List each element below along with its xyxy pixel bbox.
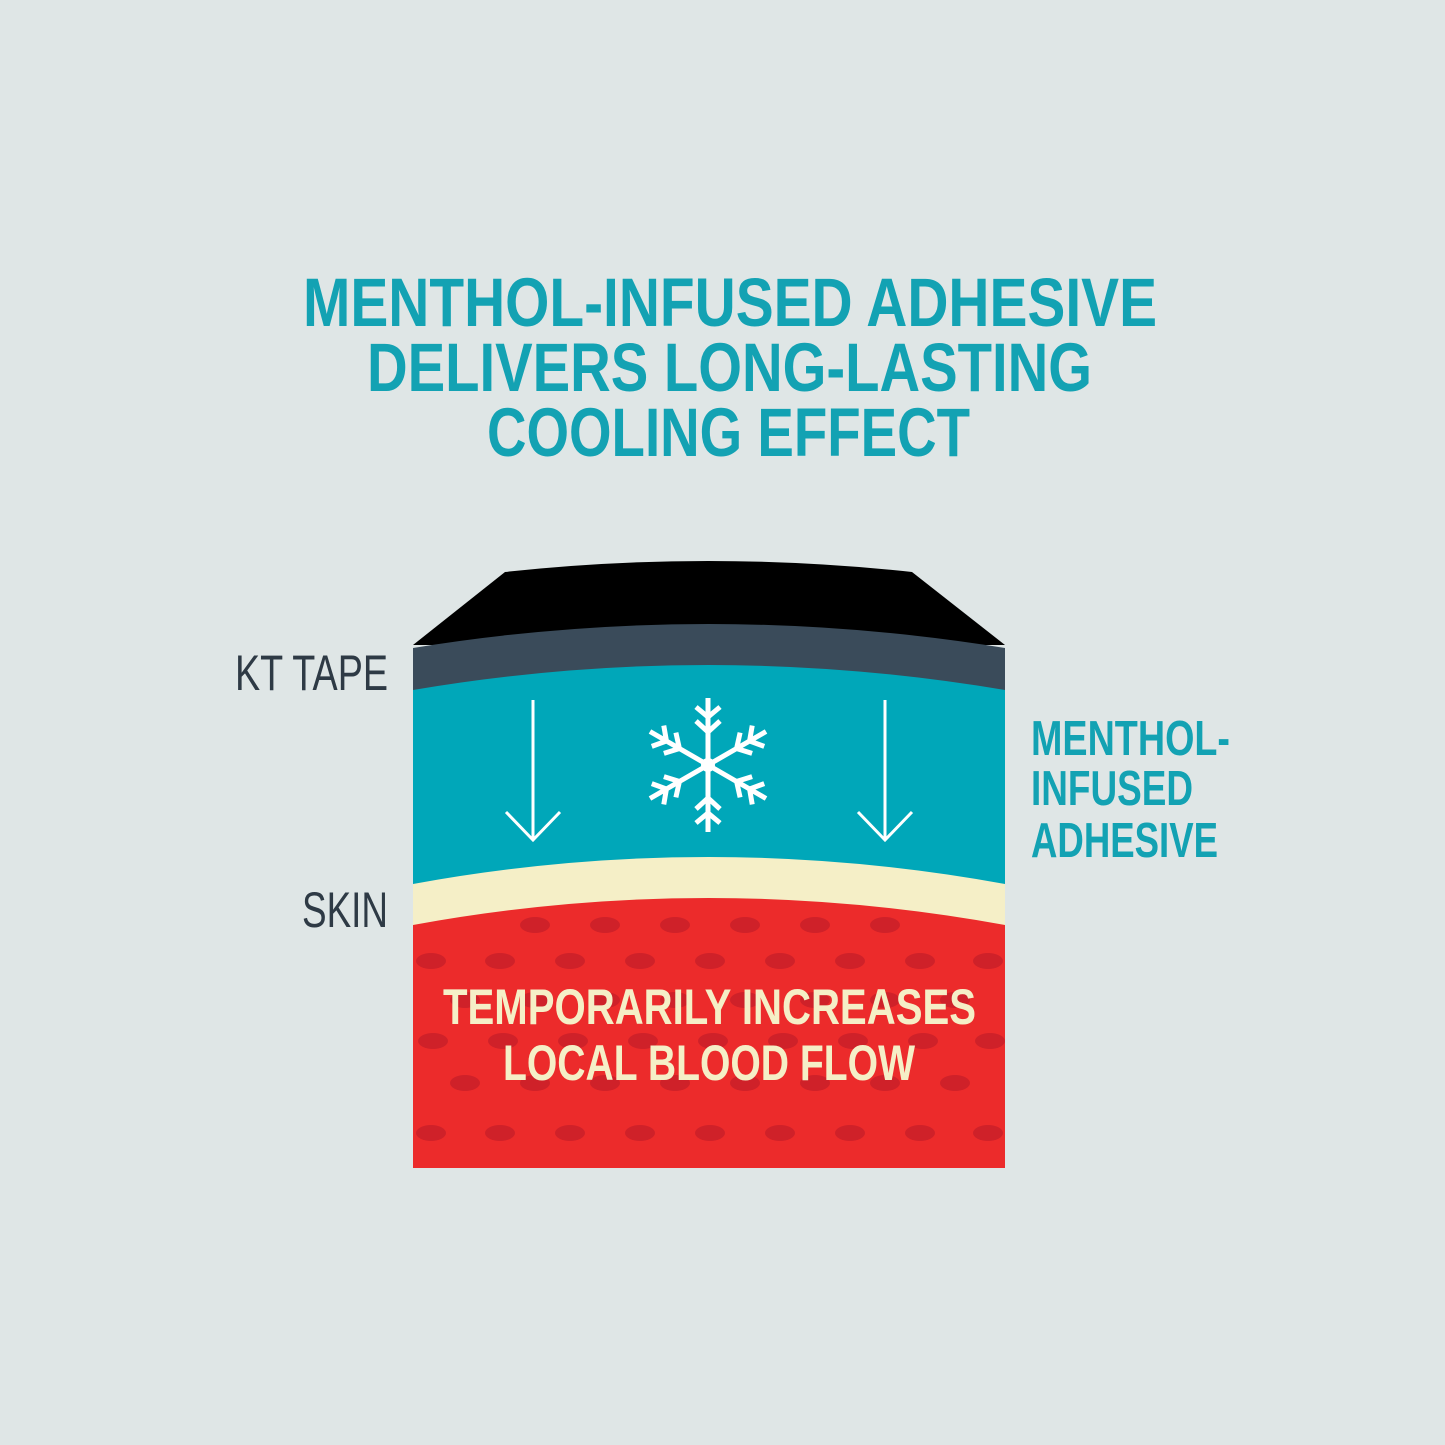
- title: DELIVERS LONG-LASTING: [367, 329, 1092, 406]
- label: menthol-infused adhesive: MENTHOL-: [1031, 712, 1230, 766]
- icon: right arrow down: [858, 700, 912, 840]
- icon: left arrow down: [506, 700, 560, 840]
- label: KT TAPE: KT TAPE: [235, 645, 388, 701]
- red layer text: [443, 979, 976, 1091]
- red layer text: LOCAL BLOOD FLOW: [503, 1035, 916, 1091]
- blood dots: [416, 917, 1005, 1141]
- red layer text: TEMPORARILY INCREASES: [443, 979, 976, 1035]
- title: MENTHOL-INFUSED ADHESIVE: [303, 264, 1157, 341]
- label: menthol-infused adhesive: ADHESIVE: [1031, 814, 1218, 868]
- label: menthol-infused adhesive: INFUSED: [1031, 762, 1193, 816]
- icon: snowflake: [644, 698, 772, 832]
- label: menthol-infused adhesive: [1031, 712, 1230, 868]
- diagram: layered cross-section: [413, 561, 1005, 1168]
- layer: tape band: [413, 624, 1005, 692]
- label: SKIN: SKIN: [302, 882, 388, 938]
- title: [303, 264, 1157, 471]
- layer: menthol adhesive: [413, 665, 1005, 885]
- layer: skin: [413, 857, 1005, 926]
- layer: blood tissue: [413, 898, 1005, 1168]
- title: COOLING EFFECT: [487, 394, 970, 471]
- layer: black tape top: [413, 561, 1005, 645]
